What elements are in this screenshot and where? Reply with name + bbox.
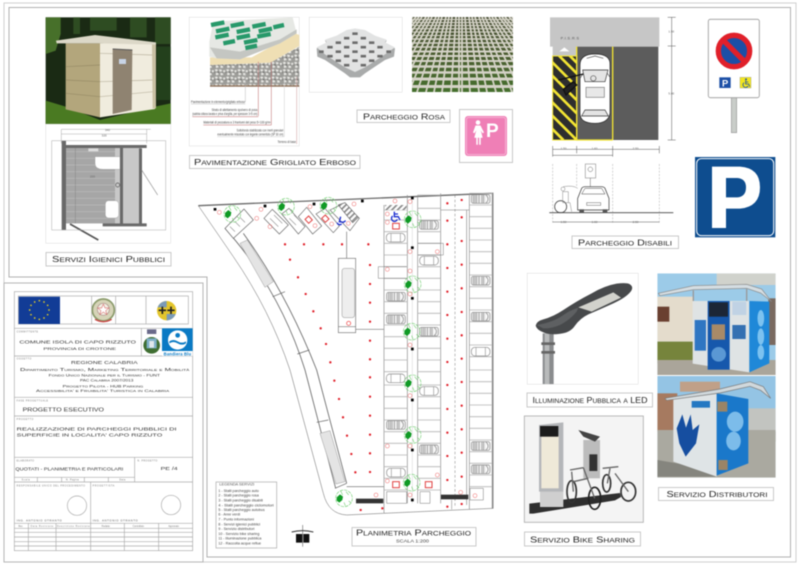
subject text: Fondo Unico Nazionale per il Turismo - FUNT xyxy=(49,373,161,377)
client heading: COMUNE ISOLA DI CAPO RIZZUTO xyxy=(19,339,136,345)
revision table: Data Revisione xyxy=(31,525,54,528)
signatures: ING. ANTONIO OTRANTO xyxy=(93,519,138,523)
signatures xyxy=(17,485,138,523)
icon: pink parking sign: P xyxy=(486,121,499,142)
title block grid xyxy=(14,292,193,551)
icon: blue parking sign xyxy=(695,157,775,237)
label: Parcheggio Disabili: Parcheggio Disabili xyxy=(578,238,672,247)
label: Illuminazione Pubblica a LED xyxy=(527,393,652,407)
client heading: PROVINCIA DI CROTONE xyxy=(43,346,117,351)
legend: services: LEGENDA SERVIZI xyxy=(219,483,254,487)
project title xyxy=(17,419,177,438)
plan view: disabled stall: 2.50 xyxy=(633,146,639,150)
plan view: disabled stall: 5.00 xyxy=(668,92,674,96)
subject text xyxy=(17,359,189,393)
legend: services: 11 - Illuminazione pubblica xyxy=(218,537,262,541)
client heading: COMMITTENTE xyxy=(17,331,38,333)
label: Planimetria Parcheggio: Planimetria Parcheggio xyxy=(356,528,471,538)
legend: services: 8 - Servizi igienici pubblici xyxy=(218,522,260,526)
legend: services: 2 - Stalli parcheggio rosa xyxy=(218,494,260,498)
drawing details: Scala xyxy=(22,480,30,482)
title block xyxy=(4,283,203,562)
legend: services: 9 - Servizio distributori xyxy=(218,527,255,531)
drawing details: QUOTATI - PLANIMETRIA E PARTICOLARI xyxy=(15,466,123,471)
signatures: PROGETTISTA xyxy=(93,485,115,488)
project phase: FASE PROGETTUALE xyxy=(17,399,48,402)
icon: EU flag xyxy=(19,297,60,324)
plan view: disabled stall xyxy=(537,17,676,157)
legend: services: 12 - Raccolta acque reflue xyxy=(218,541,261,545)
drawing details: ELABORATO xyxy=(17,459,34,462)
drawing details: N. Pagina xyxy=(66,480,79,482)
bus stalls xyxy=(240,240,345,484)
panel: water distributors xyxy=(657,273,776,478)
label: Servizi Igienici Pubblici: Servizi Igienici Pubblici xyxy=(52,255,165,264)
project phase: PROGETTO ESECUTIVO xyxy=(23,407,104,413)
panel: concrete grass block xyxy=(309,17,402,92)
photo: distributor side xyxy=(657,376,776,478)
plan view: disabled stall: 1.50 xyxy=(668,30,674,34)
project title: SUPERFICIE IN LOCALITA' CAPO RIZZUTO xyxy=(17,432,163,438)
callout texts: Terreno di base xyxy=(278,140,296,144)
label: Servizio Bike Sharing xyxy=(524,532,640,546)
floor plan: toilet cabin: 340 xyxy=(105,128,110,132)
label: Pavimentazione Grigliato Erboso xyxy=(190,156,360,168)
callout texts: eventualmente miscelato con legante cementizio (SP 30 cm) xyxy=(217,132,283,136)
legend: services: 6 - Aree verdi xyxy=(218,513,240,517)
elevation view: car and wheelchair: 2.50 xyxy=(633,220,639,224)
icon: pink parking sign xyxy=(460,110,512,162)
project phase xyxy=(17,399,104,413)
drawing details: Data xyxy=(119,479,126,482)
drawing details xyxy=(15,459,178,482)
central bus stop xyxy=(338,232,384,333)
revision table: Descrizione Revisione xyxy=(57,525,90,528)
plan view: disabled stall: P.I.S.R.S xyxy=(561,37,580,41)
revision table: Rev. xyxy=(18,526,23,528)
photo: toilet cabin xyxy=(46,17,171,124)
label: Parcheggio Rosa xyxy=(357,110,450,122)
revision table: Redatto xyxy=(102,525,111,528)
label: Servizio Bike Sharing: Servizio Bike Sharing xyxy=(530,535,635,544)
revision table: Controllato xyxy=(133,525,145,528)
callout texts: Materiali di pezzatura a 3 frantumi del peso 5÷100 g/m² xyxy=(203,120,271,124)
subject text: Accessibilita' e Fruibilita' Turistica in Calabria xyxy=(36,389,169,393)
icon: north arrow xyxy=(292,525,313,547)
icon: municipal crest xyxy=(143,329,160,354)
dimension boxes xyxy=(378,210,483,509)
client heading xyxy=(17,331,136,351)
floor plan: toilet cabin: 220 xyxy=(90,174,95,178)
legend: services: 7 - Punto informazioni xyxy=(218,518,254,522)
label: Parcheggio Disabili xyxy=(572,236,678,248)
photo: distributor front xyxy=(657,273,776,375)
legend: services: 4 - Stalli parcheggio ciclomotori xyxy=(218,503,274,507)
icon: Bandiera Blu: Bandiera Blu xyxy=(164,351,191,356)
drawing details: PE /4 xyxy=(161,466,178,471)
illustration: paving layers xyxy=(209,17,299,87)
parking stall dividers xyxy=(384,193,492,490)
callout texts: Pavimentazione in elemento/grigliato erboso xyxy=(191,100,245,104)
legend: services: 3 - Stalli parcheggio disabili xyxy=(218,498,263,502)
legend: services xyxy=(216,482,277,548)
parking column lines xyxy=(384,193,469,513)
signatures: RESPONSABILE UNICO DEL PROCEDIMENTO xyxy=(17,485,85,488)
subject text: OGGETTO xyxy=(17,359,32,361)
icon: Calabria crest xyxy=(157,301,176,320)
label: Servizi Igienici Pubblici xyxy=(46,252,171,266)
red parking markers xyxy=(285,200,462,510)
cars xyxy=(386,195,490,477)
site plan xyxy=(198,193,493,515)
red reserved stall icons xyxy=(305,215,432,488)
legend: services: 1 - Stalli parcheggio auto xyxy=(218,489,259,493)
legend: services: 10 - Servizio bike sharing xyxy=(218,532,259,536)
label: Planimetria Parcheggio xyxy=(352,528,476,546)
elevation view: car and wheelchair: 1.60 xyxy=(592,220,598,224)
panel: disabled parking drawing xyxy=(537,17,676,224)
label: Parcheggio Rosa: Parcheggio Rosa xyxy=(363,112,445,121)
lamp posts xyxy=(215,198,412,500)
elevation view: car and wheelchair: 1.50 xyxy=(561,220,567,224)
label: Illuminazione Pubblica a LED: Illuminazione Pubblica a LED xyxy=(532,396,648,405)
callout texts: Sottofondo stabilizzato con inerti granulari xyxy=(237,128,284,132)
icon: no parking sign with disabled exception xyxy=(708,19,759,133)
label: Servizio Distributori xyxy=(658,488,774,500)
plan view: disabled stall: 1.50 xyxy=(561,146,567,150)
label: Planimetria Parcheggio: SCALA 1:200 xyxy=(396,538,430,544)
trees xyxy=(224,197,421,507)
elevation view: car and wheelchair xyxy=(549,164,673,224)
signatures: ING. ANTONIO OTRANTO xyxy=(17,519,62,523)
panel: grass paving section xyxy=(189,17,299,146)
icon: emblem of Italy xyxy=(92,299,114,322)
panel: LED street light xyxy=(527,273,638,384)
callout texts: (sabbia silicea lavata e priva d'argilla, per spessore 3÷5 cm) xyxy=(192,112,257,116)
red reference numbers xyxy=(217,199,477,498)
icon: no parking sign with disabled exception: P xyxy=(722,78,728,88)
bike share and service bars xyxy=(356,495,468,503)
drawing details: N. PROGETTO xyxy=(137,460,158,462)
callout texts: Strato di allettamento spolvero di posa xyxy=(212,108,257,112)
photo: grass paving xyxy=(411,16,514,93)
label: Servizio Distributori: Servizio Distributori xyxy=(666,490,768,499)
subject text: PAC Calabria 2007/2013 xyxy=(80,378,133,382)
floor plan: toilet cabin xyxy=(46,124,171,243)
subject text: Progetto Pilota - HUB Parking xyxy=(63,384,144,388)
icon: Bandiera Blu xyxy=(162,328,193,356)
subject text: Dipartimento Turismo, Marketing Territoriale e Mobilità xyxy=(20,367,189,372)
revision table xyxy=(18,525,180,528)
callout texts xyxy=(191,100,296,144)
subject text: REGIONE CALABRIA xyxy=(71,360,139,365)
legend: services: 5 - Stalli parcheggio autobus xyxy=(218,508,265,512)
floor plan: toilet cabin: 320 xyxy=(102,133,107,137)
diagonal parking stalls xyxy=(225,203,359,238)
accessible parking icons xyxy=(337,212,400,225)
plan view: disabled stall: 1.60 xyxy=(592,146,598,150)
hatched reserved stall xyxy=(385,205,407,210)
panel: bike sharing xyxy=(524,416,643,522)
label: Pavimentazione Grigliato Erboso: Pavimentazione Grigliato Erboso xyxy=(194,158,356,167)
project title: PROGETTO xyxy=(17,419,34,421)
revision table: Approvato xyxy=(168,525,180,528)
callout lines xyxy=(191,62,297,144)
road edges and kerbs xyxy=(198,193,493,515)
panel: public toilets xyxy=(46,17,171,243)
project title: REALIZZAZIONE DI PARCHEGGI PUBBLICI DI xyxy=(17,426,177,432)
